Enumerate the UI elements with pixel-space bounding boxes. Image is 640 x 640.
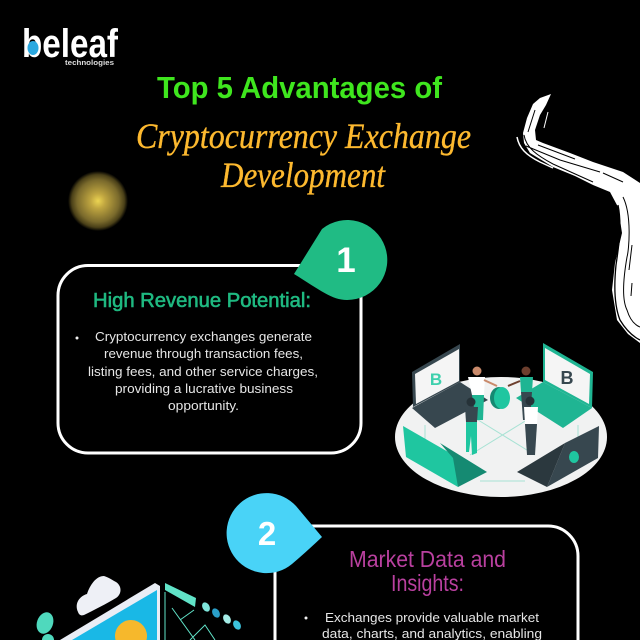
illustration: laptop with coin and analytics [34,576,243,640]
number badge 2 [227,493,322,573]
person: back right [508,366,533,420]
number badge 2: 2 [258,515,276,552]
subtitle: Cryptocurrency Exchange Development: Development [220,155,386,195]
bullet text: Exchanges provide valuable market [325,610,539,625]
person: front right [524,396,538,455]
bullet text: revenue through transaction fees, [104,346,303,361]
logo: beleaf technologies: technologies [65,58,114,67]
laptop: top left [412,344,488,428]
person: front left [465,398,478,455]
laptop screen [60,583,160,640]
heading [349,546,506,596]
bullet text: listing fees, and other service charges, [88,364,318,379]
heading: Insights: [391,570,464,596]
coin [490,387,510,409]
heading: Market Data and [349,546,506,572]
panel: market data and insights [227,493,578,640]
number badge 1 [294,220,387,300]
analytics panel [165,583,215,640]
title line: Top 5 Advantages of: Top 5 Advantages of [157,70,443,105]
panel outline [58,266,361,453]
subtitle: Cryptocurrency Exchange Development [136,116,471,195]
icon: cloud [77,576,120,615]
bullet text [304,610,542,640]
panel: high revenue potential [58,220,387,453]
panel outline [275,526,578,640]
laptop: top right: B [560,368,574,388]
laptop: top right [516,343,593,428]
bullet text: providing a lucrative business [115,381,294,396]
laptop: bottom left [403,426,487,487]
brush stroke decoration [517,94,640,343]
number badge 1: 1 [336,241,356,280]
laptop: top left: B [430,370,442,389]
illustration: people trading bitcoin around laptops [395,343,607,497]
heading: High Revenue Potential: [93,290,311,312]
laptop: bottom right [517,426,599,487]
bullet text: opportunity. [168,398,239,413]
subtitle: Cryptocurrency Exchange Development: Cryptocurrency Exchange [136,116,471,156]
bullet text: Cryptocurrency exchanges generate [95,329,312,344]
dots [200,601,243,631]
badges [34,610,56,640]
person: back left [468,366,497,420]
logo: beleaf technologies: beleaf [22,22,119,66]
bullet text [76,329,318,413]
glowing yellow orb [68,171,128,231]
